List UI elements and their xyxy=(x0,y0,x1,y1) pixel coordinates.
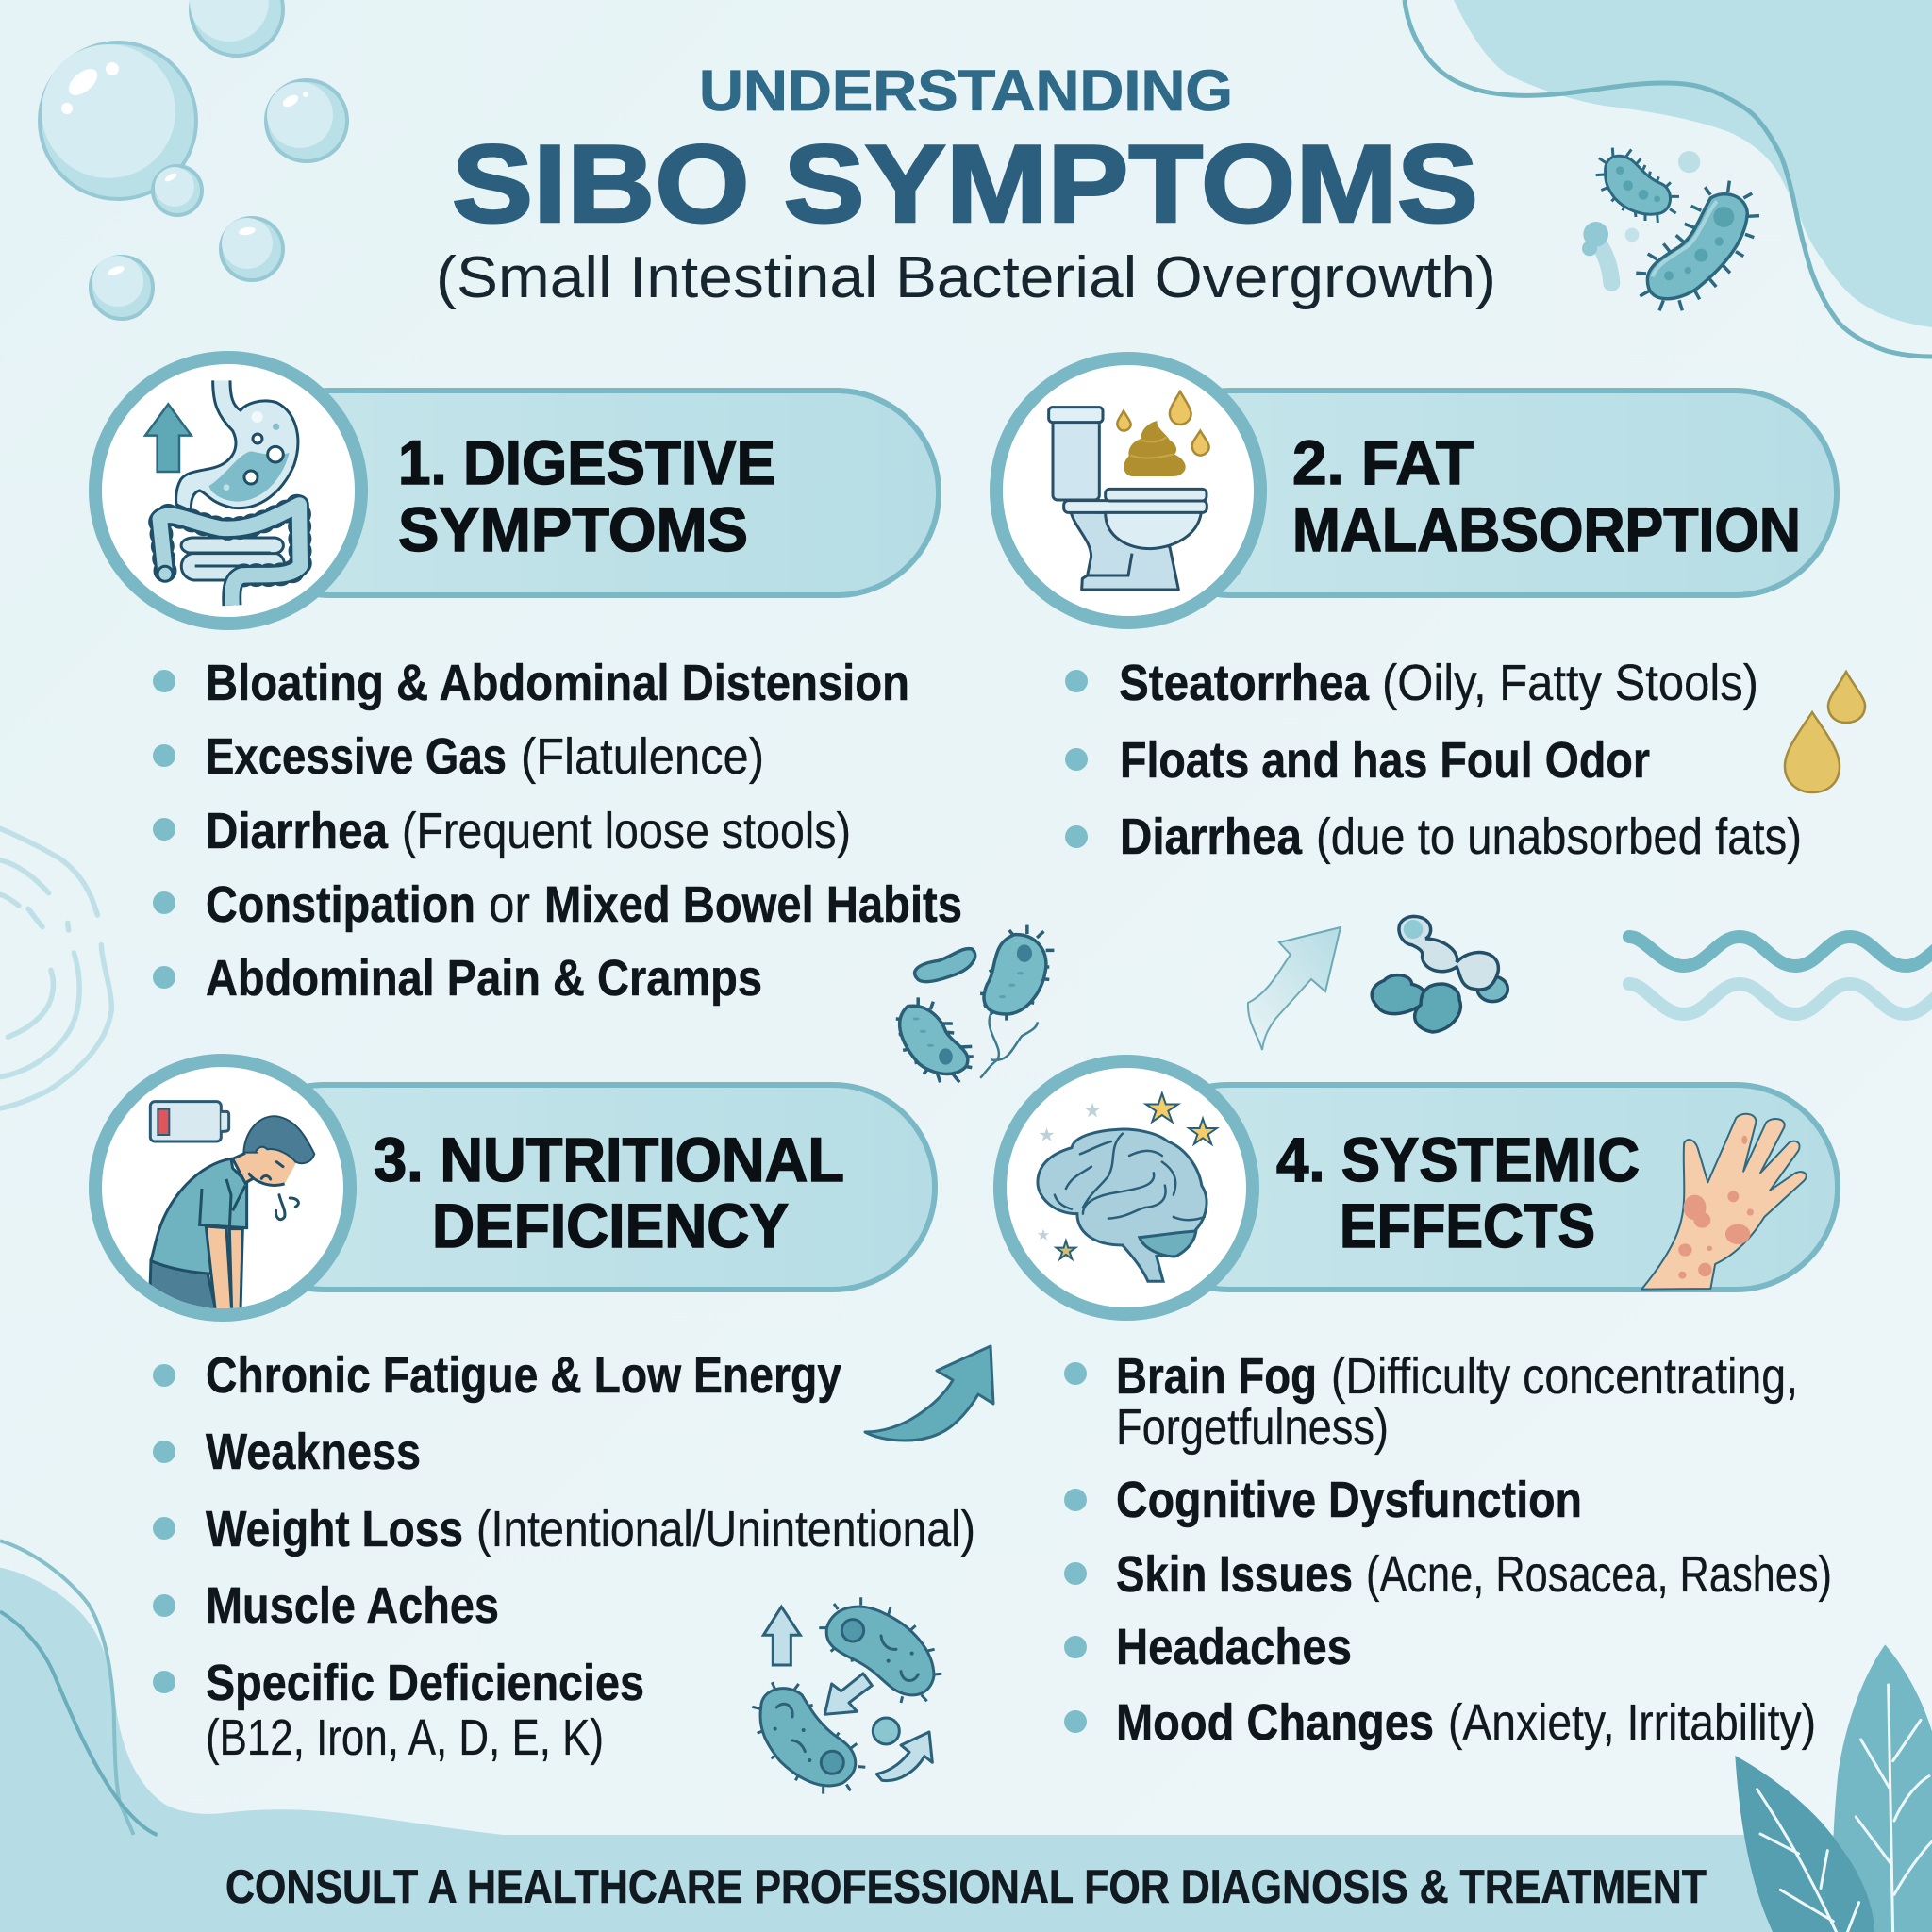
heading 4 xyxy=(1276,1124,1640,1260)
icon: bacteria cluster xyxy=(752,1597,941,1794)
heading 2: 2. FAT xyxy=(1292,427,1474,497)
symptom list 2: (due to unabsorbed fats) xyxy=(1316,808,1802,865)
icon ring 3 xyxy=(95,1060,350,1315)
decoration: left ripples xyxy=(0,828,111,1108)
decoration: bottom left blob xyxy=(0,1541,503,1932)
icon: bacteria top right xyxy=(1582,148,1759,310)
arrow: curved teal arrow xyxy=(865,1346,993,1441)
decoration: bubbles xyxy=(40,0,347,319)
symptom list 2: Diarrhea xyxy=(1120,808,1303,865)
symptom list 3: (B12, Iron, A, D, E, K) xyxy=(206,1709,604,1766)
symptom list 4 xyxy=(1064,1348,1832,1751)
header pill 1 xyxy=(228,391,939,595)
symptom list 4: Skin Issues xyxy=(1116,1546,1353,1603)
symptom list 4: (Difficulty concentrating, xyxy=(1331,1348,1798,1405)
panel: digestive symptoms xyxy=(95,358,962,1007)
icon: hand with rash xyxy=(1641,1114,1807,1290)
icon: fatigued person with low battery xyxy=(149,1116,314,1311)
symptom list 4: Cognitive Dysfunction xyxy=(1116,1472,1582,1528)
heading 3: 3. NUTRITIONAL xyxy=(374,1124,844,1194)
footer text: CONSULT A HEALTHCARE PROFESSIONAL FOR DIAGNOSIS & TREATMENT xyxy=(225,1860,1707,1913)
icon: brain with stars xyxy=(1038,1093,1217,1281)
symptom list 4: Brain Fog xyxy=(1116,1348,1317,1405)
symptom list 1 xyxy=(153,655,962,1007)
arrow: light arrow xyxy=(1248,927,1341,1050)
heading 2 xyxy=(1292,427,1801,564)
symptom list 4: Headaches xyxy=(1116,1619,1352,1675)
heading 3 xyxy=(374,1124,844,1260)
heading 1: 1. DIGESTIVE xyxy=(398,427,775,497)
decoration: top right blob xyxy=(1405,0,1932,357)
symptom list 1: (Frequent loose stools) xyxy=(402,803,851,859)
icon ring 2 xyxy=(996,358,1260,623)
symptom list 1: (Flatulence) xyxy=(521,728,764,785)
title: understanding: UNDERSTANDING xyxy=(699,58,1233,123)
symptom list 3: Specific Deficiencies xyxy=(206,1655,644,1711)
icon ring 1 xyxy=(95,358,361,624)
icon ring 4 xyxy=(1000,1061,1253,1314)
symptom list 1: Constipation xyxy=(206,876,475,933)
panel: fat malabsorption xyxy=(996,358,1865,865)
title block xyxy=(436,58,1496,310)
header pill 2 xyxy=(1128,391,1837,595)
heading 4: EFFECTS xyxy=(1340,1191,1595,1260)
heading 1: SYMPTOMS xyxy=(398,494,748,564)
symptom list 2: Steatorrhea xyxy=(1119,655,1370,711)
heading 4: 4. SYSTEMIC xyxy=(1276,1124,1640,1194)
heading 1 xyxy=(398,427,775,564)
symptom list 1: Diarrhea xyxy=(206,803,389,859)
icon: stomach and intestines xyxy=(145,380,300,606)
symptom list 3: (Intentional/Unintentional) xyxy=(476,1501,975,1557)
symptom list 2: Floats and has Foul Odor xyxy=(1120,732,1650,789)
icon: bacteria between panels xyxy=(896,925,1054,1082)
panel: nutritional deficiency xyxy=(95,1060,993,1794)
symptom list 4: (Anxiety, Irritability) xyxy=(1448,1694,1816,1751)
symptom list 3 xyxy=(153,1347,975,1766)
heading 2: MALABSORPTION xyxy=(1292,494,1801,564)
heading 3: DEFICIENCY xyxy=(432,1191,789,1260)
symptom list 3: Chronic Fatigue & Low Energy xyxy=(206,1347,841,1404)
decoration: waves xyxy=(1629,937,1932,1014)
symptom list 1: Abdominal Pain & Cramps xyxy=(206,950,762,1007)
icon: fat molecules xyxy=(1372,916,1507,1032)
symptom list 1: Bloating & Abdominal Distension xyxy=(206,655,909,711)
symptom list 3: Muscle Aches xyxy=(206,1577,499,1634)
header pill 4 xyxy=(1126,1085,1838,1290)
symptom list 3: Weight Loss xyxy=(206,1501,463,1557)
symptom list 4: (Acne, Rosacea, Rashes) xyxy=(1366,1546,1832,1603)
symptom list 1: Mixed Bowel Habits xyxy=(544,876,962,933)
icon: toilet with stool and oil drops xyxy=(1049,391,1209,590)
symptom list 2: (Oily, Fatty Stools) xyxy=(1382,655,1758,711)
decoration: leaves xyxy=(1735,1644,1932,1932)
symptom list 2 xyxy=(1065,655,1802,865)
title: SIBO symptoms: SIBO SYMPTOMS xyxy=(452,122,1478,245)
symptom list 4: Forgetfulness) xyxy=(1116,1399,1389,1456)
symptom list 1: Excessive Gas xyxy=(206,728,507,785)
symptom list 4: Mood Changes xyxy=(1116,1694,1434,1751)
subtitle: (Small Intestinal Bacterial Overgrowth) xyxy=(436,245,1496,310)
symptom list 1: or xyxy=(489,876,530,933)
header pill 3 xyxy=(223,1085,935,1290)
footer banner xyxy=(0,1541,1932,1932)
panel: systemic effects xyxy=(1000,1061,1838,1751)
icon: oil drops xyxy=(1785,672,1865,792)
icon: battery xyxy=(150,1102,229,1141)
symptom list 3: Weakness xyxy=(206,1424,421,1480)
